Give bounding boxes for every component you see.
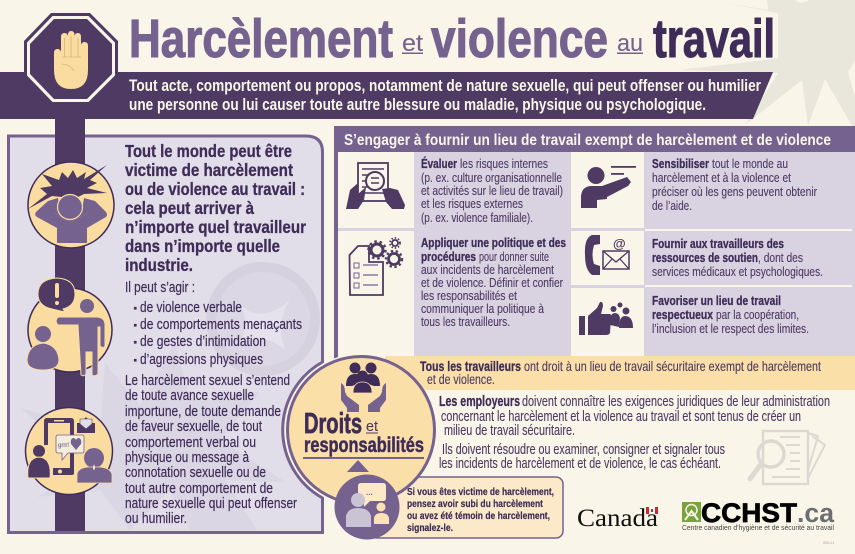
text block: sexual harassment definition: connotation sexuelle ou de [125,465,266,481]
circle heading [304,408,424,457]
list: forms of harassment: de violence verbale [140,300,242,316]
icon: two people talking: ... [366,488,373,497]
callout: report harassment [370,477,563,538]
circle heading: responsabilités [304,433,424,457]
text: apply a policy: pour donner suite [479,249,549,264]
text: apply a policy: communiquer la politique à [421,301,545,316]
icon: checklist and gears [350,238,402,295]
icon: person presenting [581,166,636,208]
text block: sexual harassment definition: importune, de toute demande [125,404,281,420]
text: evaluate risks: et activités sur le lieu de travail) [421,183,563,198]
icon: telephone and email: @ [613,236,626,251]
text block: sexual harassment definition: nature sexuelle qui peut offenser [125,496,297,512]
vertical connector band [55,119,85,531]
icon: phone messages and harassment: grrr! [58,443,69,449]
text: raise awareness: de l’aide. [652,198,692,213]
text: employer responsibilities: milieu de travail sécuritaire. [444,423,575,439]
text: employer responsibilities: Les employeurs [439,394,520,410]
logo: CCHST.ca: .ca [797,498,835,528]
icon: documents with magnifier watermark [750,431,825,484]
subtitle definition [129,77,761,114]
circle heading: Droits [304,408,362,440]
callout: report harassment: ou avez été témoin de harcèlement, [407,510,550,522]
logo: Canada wordmark: Canada [577,505,658,532]
text: evaluate risks: les risques internes [460,156,548,171]
heading: anyone can be a victim: n’importe quel travailleur [125,217,306,237]
icon: person pointing at a seated person [27,278,112,376]
title [129,9,775,69]
text: employer responsibilities: Ils doivent résoudre ou examiner, consigner et signaler tous [442,442,725,458]
list: forms of harassment: Il peut s’agir : [125,280,195,296]
icon: people in hands [341,362,386,412]
icon: stop sign with raised hand [24,13,118,105]
text: apply a policy: et de violence. Définir et confier [421,275,564,290]
list: forms of harassment: d’agressions physiques [140,352,263,368]
text: evaluate risks: (p. ex. culture organisationnelle [421,170,562,185]
title: au [617,30,643,57]
text: respectful workplace: respectueux [652,307,714,322]
text block: sexual harassment definition: physique ou message à [125,450,250,466]
text: employer responsibilities: les incidents de harcèlement et de violence, le cas échéant. [439,456,721,472]
heading: anyone can be a victim [125,141,306,275]
text: provide support resources: , dont des [758,250,803,265]
subtitle definition: une personne ou lui causer toute autre blessure ou maladie, physique ou psychologique. [129,96,706,114]
title: Harcèlement [129,9,393,69]
list: forms of harassment: de comportements menaçants [140,317,302,333]
callout: report harassment: Si vous êtes victime de harcèlement, [407,486,554,498]
yellow rights band: et de violence. [427,371,495,387]
title: violence [431,9,608,69]
circle: rights and responsibilities [288,356,434,504]
list: forms of harassment: de gestes d’intimidation [140,334,266,350]
text: provide support resources [652,236,823,279]
icon: document under magnifier [346,163,405,209]
document date code: 2021-01 [823,541,834,545]
heading: anyone can be a victim: dans n’importe quelle [125,236,280,256]
text: respectful workplace: l’inclusion et le respect des limites. [652,321,809,336]
text: raise awareness: Sensibiliser [652,156,709,171]
text: apply a policy: aux incidents de harcèlement [421,262,554,277]
text: provide support resources: ressources de soutien [652,250,758,265]
cream halo behind rights circle [284,354,438,506]
yellow rights band: Tous les travailleurs [420,358,521,374]
background starburst [678,0,855,126]
text: evaluate risks: et les risques externes [421,196,523,211]
callout: report harassment: pensez avoir subi du harcèlement [407,498,543,510]
text: respectful workplace: Favoriser un lieu de travail [652,293,781,308]
watermark star and swirl [20,267,315,530]
text: apply a policy: tous les travailleurs. [421,314,510,329]
logo: CCHST.ca: Centre canadien d’hygiène et de sécurité au travail [682,523,834,532]
icon: phone messages and harassment [26,408,112,494]
text block: sexual harassment definition: de toute avance sexuelle [125,388,254,404]
icon: stressed person with burst [28,162,114,248]
circle heading: et [366,418,379,435]
yellow rights band [385,356,855,390]
callout: report harassment: signalez-le. [407,522,453,534]
icon: telephone and email [585,235,629,275]
logo: CCHST.ca: CCHST [701,498,798,528]
text block: sexual harassment definition: comportement verbal ou [125,435,256,451]
heading: anyone can be a victim: victime de harcèlement [125,160,293,180]
text: respectful workplace [652,293,809,336]
text block: sexual harassment definition: tout autre comportement de [125,481,273,497]
title: et [402,30,423,57]
text: raise awareness [652,156,818,213]
heading: anyone can be a victim: industrie. [125,255,193,275]
text: apply a policy: procédures [421,249,476,264]
text: evaluate risks [421,156,563,225]
text: evaluate risks: Évaluer [421,156,457,171]
heading: anyone can be a victim: Tout le monde peut être [125,141,292,161]
text: apply a policy: les responsabilités et [421,288,517,303]
text: raise awareness: harcèlement et à la violence et [652,170,791,185]
title band [0,72,773,119]
panel: workplace commitment [334,126,855,366]
panel: left information panel [8,136,322,532]
text: employer responsibilities [439,394,830,472]
text: apply a policy: Appliquer une politique et des [421,235,566,250]
icon: two people talking [334,474,400,540]
heading: anyone can be a victim: ou de violence au travail : [125,179,305,199]
text block: sexual harassment definition [125,373,297,527]
text: respectful workplace: par la coopération, [716,307,799,322]
text: provide support resources: Fournir aux travailleurs des [652,236,784,251]
text block: sexual harassment definition: Le harcèlement sexuel s’entend [125,373,290,389]
text: evaluate risks: (p. ex. violence familiale). [421,210,533,225]
icon: thumbs up and group [579,302,633,335]
text block: sexual harassment definition: ou humilier. [125,511,187,527]
text block: sexual harassment definition: de faveur sexuelle, de tout [125,419,262,435]
title: travail [653,9,775,69]
heading: anyone can be a victim: cela peut arriver à [125,198,254,218]
list: forms of harassment [125,280,302,368]
text: apply a policy [421,235,566,329]
text: raise awareness: tout le monde au [712,156,788,171]
logo: CCHST.ca [682,498,835,532]
